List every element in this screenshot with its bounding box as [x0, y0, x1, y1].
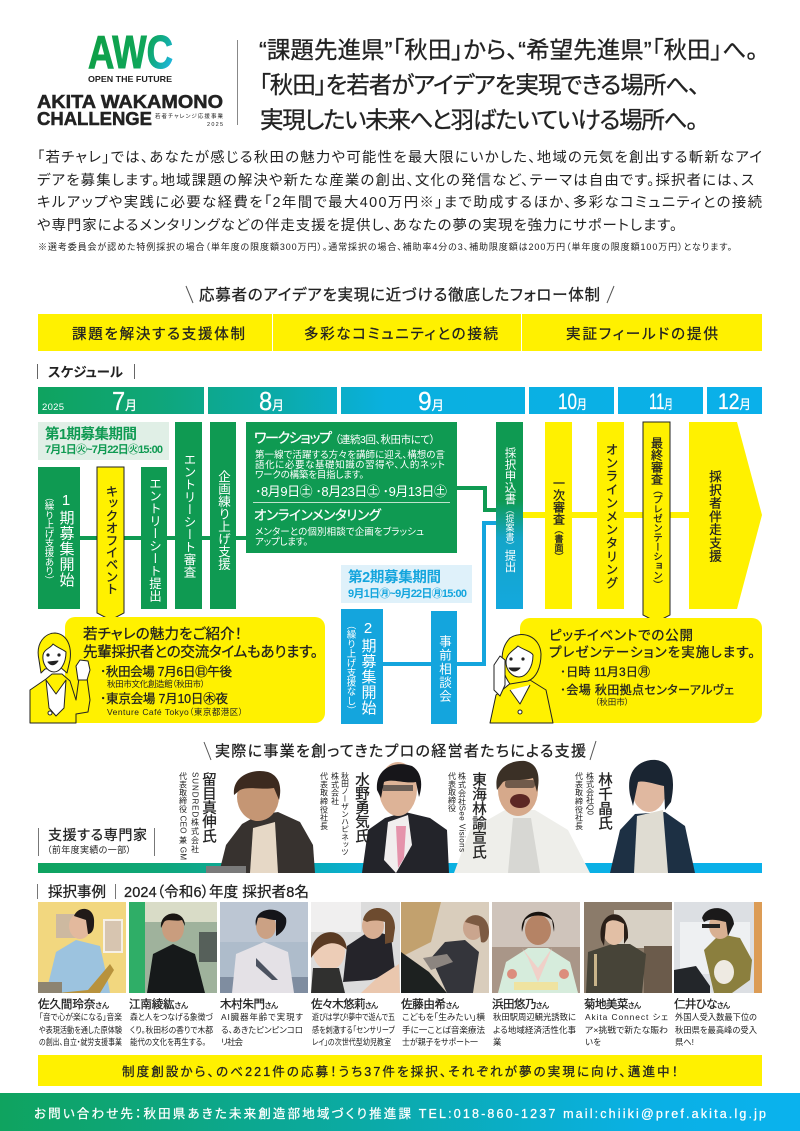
- callout: kickoff event details: Venture Café Tokyo（東京都港区）: [107, 707, 243, 717]
- case 3: Kimura: 木村朱門さん: [220, 997, 279, 1011]
- month bar: 11月: [649, 389, 673, 414]
- expert: Mizuno: 秋田ノーザンハピネッツ: [340, 771, 350, 856]
- label: supporting experts: 支援する専門家: [48, 827, 147, 843]
- case 6: Hamada: [492, 902, 580, 1047]
- headline: [259, 37, 758, 133]
- workshop panel: ･8月9日㊏ ･8月23日㊏ ･9月13日㊏: [255, 484, 447, 499]
- step: entry sheet review: [175, 422, 202, 609]
- step: kickoff event: キックオフイベント: [104, 485, 118, 595]
- expert: Hayashi: 株式会社Q0: [586, 771, 594, 816]
- case 2: Enami: [129, 902, 217, 1047]
- case 2: Enami: 能代の文化を再生する。: [130, 1037, 206, 1047]
- case 4: Sasaki: 感を刺激する「センサリープ: [312, 1025, 396, 1035]
- step: entry sheet submission: [141, 467, 167, 609]
- headline: 「秋田」を若者がアイデアを実現できる場所へ、: [259, 72, 700, 98]
- footnote: ※選考委員会が認めた特例採択の場合（単年度の限度額300万円）。通常採択の場合、補助率4分の3、補助限度額は200万円（単年度の限度額100万円）となります。: [38, 241, 732, 252]
- month bar: 10月: [558, 389, 587, 414]
- section heading: expert support: 実際に事業を創ってきたプロの経営者たちによる支援: [215, 743, 586, 760]
- case 4: Sasaki: 遊びは学び!夢中で遊んで五: [312, 1012, 395, 1022]
- headline: 実現したい未来へと羽ばたいていける場所へ。: [260, 107, 698, 133]
- support band: 多彩なコミュニティとの接続: [304, 325, 498, 343]
- case 4: Sasaki: [311, 902, 400, 1047]
- logo: Akita Wakamono Challenge: 若者チャレンジ応援事業: [155, 112, 223, 120]
- section heading: follow-up system: 応募者のアイデアを実現に近づける徹底したフォロー体制: [199, 285, 600, 304]
- intro text: キルアップや実践に必要な経費を「2年間で最大400万円※」まで助成するほか、多彩なコミュニティとの接続: [37, 193, 762, 211]
- case 5: Sato: 佐藤由希さん: [401, 997, 460, 1011]
- logo: Akita Wakamono Challenge: OPEN THE FUTURE: [88, 74, 172, 84]
- step: application submission: 採択申込書 （提案書） 提出: [504, 447, 516, 572]
- case 1: Sakuma: 「音で心が楽になる」音楽: [39, 1012, 123, 1022]
- expert: Shoji: 代表取締役: [448, 771, 456, 813]
- step: pre-consultation: 事前相談会: [437, 635, 451, 702]
- footer contact: [0, 1093, 800, 1131]
- step: period 1 start: 1期募集開始: [58, 492, 74, 587]
- connector lines: [80, 488, 689, 664]
- step: adopter support arrow: 採択者伴走支援: [707, 470, 721, 562]
- case 1: Sakuma: 佐久間玲奈さん: [38, 997, 110, 1011]
- step: period 1 start: （繰り上げ支援あり）: [42, 492, 54, 585]
- month bar: 7月: [112, 386, 137, 416]
- step: online mentoring: [597, 422, 624, 609]
- case 3: Kimura: AI臓器年齢で実現す: [221, 1012, 303, 1022]
- support band: 実証フィールドの提供: [566, 326, 718, 343]
- case 3: Kimura: [220, 902, 308, 1047]
- period 1 box: 第1期募集期間: [45, 425, 137, 443]
- case 6: Hamada: 秋田駅周辺観光誘致に: [493, 1012, 576, 1022]
- period 2 box: 9月1日㊊~9月22日㊊15:00: [348, 587, 467, 600]
- step: plan refinement: [210, 422, 236, 609]
- case 5: Sato: 手に一ことば音楽療法: [402, 1025, 486, 1035]
- workshop panel: ワークショップ: [254, 430, 332, 446]
- intro text: 「若チャレ」では、あなたが感じる秋田の魅力や可能性を最大限にいかした、地域の元気を創出する斬新なアイ: [37, 149, 762, 166]
- expert: Shoji: [448, 761, 590, 873]
- step: entry sheet review: エントリーシート審査: [182, 453, 196, 578]
- expert: Hayashi: 代表取締役社長: [574, 771, 584, 831]
- gradient strip: [38, 863, 762, 873]
- workshop panel: ワークの構築を目指します。: [255, 469, 364, 481]
- case 4: Sasaki: レイ」の次世代型幼児教室: [312, 1037, 391, 1047]
- step: period 2 start: 2期募集開始: [360, 620, 376, 715]
- step: plan refinement: 企画練り上げ支援: [216, 470, 230, 570]
- expert: Shoji: 東海林諭宣氏: [470, 772, 486, 859]
- expert: Tomeme: [178, 771, 315, 873]
- workshop panel: （連続3回、秋田市にて）: [335, 433, 435, 446]
- cases heading: [37, 884, 309, 901]
- case 7: Kikuchi: [584, 902, 672, 1047]
- step: period 2 start: （繰り上げ支援なし）: [344, 620, 356, 715]
- expert: Tomeme: 留目真伸氏: [200, 772, 216, 843]
- headline: “課題先進県”「秋田」から、“希望先進県”「秋田」へ。: [259, 37, 758, 63]
- workshop panel: オンラインメンタリング: [254, 508, 382, 523]
- case 8: Nii: [674, 902, 762, 1047]
- month bar: [38, 386, 762, 416]
- schedule label: スケジュール: [48, 365, 124, 380]
- callout: kickoff event details: ･秋田会場 7月6日㊐午後: [100, 665, 232, 679]
- period 1 box: 7月1日㊋~7月22日㊋15:00: [45, 443, 163, 456]
- month bar: 8月: [259, 386, 284, 416]
- expert: Tomeme: SUNDRED株式会社: [190, 772, 200, 854]
- case 2: Enami: くり。秋田杉の香りで木都: [130, 1025, 214, 1035]
- case 7: Kikuchi: Akita Connect シェ: [585, 1012, 668, 1022]
- period 2 box: [341, 565, 472, 603]
- label: supporting experts: [38, 827, 155, 856]
- case 3: Kimura: る、あきたピンピンコロ: [221, 1025, 303, 1035]
- callout: pitch event details: ･日時 11月3日㊊: [560, 665, 650, 679]
- case 8: Nii: 外国人受入数最下位の: [675, 1012, 757, 1022]
- month bar: 12月: [718, 389, 751, 414]
- case 7: Kikuchi: いを: [585, 1037, 601, 1047]
- case 4: Sasaki: 佐々木悠莉さん: [311, 997, 379, 1011]
- result band: 制度創設から、のべ221件の応募！うち37件を採択、それぞれが夢の実現に向け、邁進中！: [122, 1064, 678, 1079]
- step: adopter support arrow: [689, 422, 762, 609]
- illustration: woman calling out: [490, 635, 553, 723]
- expert: Hayashi: 林千晶氏: [596, 772, 612, 830]
- case 6: Hamada: 業: [493, 1037, 502, 1047]
- case 1: Sakuma: や表現活動を通した原体験: [39, 1025, 123, 1035]
- step: kickoff event: [97, 467, 124, 620]
- intro text: や専門家によるメンタリングなどの伴走支援を提供し、あなたの夢の実現を強力にサポートします。: [37, 217, 677, 234]
- case 8: Nii: 仁井ひなさん: [674, 997, 731, 1011]
- month bar: 2025: [42, 402, 64, 413]
- callout: kickoff event details: 若チャレの魅力をご紹介！: [83, 626, 242, 643]
- expert: Tomeme: 代表取締役 CEO 兼 GM: [178, 771, 188, 860]
- logo: Akita Wakamono Challenge: 2025: [207, 122, 223, 128]
- step: pre-consultation: [431, 611, 457, 724]
- case 1: Sakuma: [38, 902, 126, 1047]
- expert: Mizuno: 水野勇気氏: [353, 772, 369, 843]
- expert: Hayashi: [574, 760, 695, 873]
- case 6: Hamada: よる地域経済活性化事: [493, 1025, 576, 1035]
- footer contact: お問い合わせ先：秋田県あきた未来創造部地域づくり推進課 TEL:018-860-1237 mail:chiiki@pref.akita.lg.jp: [34, 1106, 766, 1121]
- callout: kickoff event details: ･東京会場 7月10日㊍夜: [100, 692, 228, 706]
- step: entry sheet submission: エントリーシート提出: [147, 477, 161, 602]
- logo: Akita Wakamono Challenge: CHALLENGE: [37, 109, 152, 129]
- period 1 box: [38, 422, 169, 460]
- callout: kickoff event details: 秋田市文化創造館（秋田市）: [107, 679, 205, 689]
- workshop panel: アップします。: [255, 537, 308, 548]
- step: period 2 start: [341, 609, 383, 724]
- case 7: Kikuchi: 菊地美菜さん: [584, 997, 642, 1011]
- logo: Akita Wakamono Challenge: AWC: [88, 26, 173, 78]
- expert: Mizuno: 株式会社: [330, 771, 340, 806]
- workshop panel: [246, 422, 457, 553]
- case 2: Enami: 森と人をつなげる象徴づ: [130, 1012, 213, 1022]
- workshop panel: 第一線で活躍する方々を講師に迎え、構想の言: [255, 449, 445, 461]
- case 3: Kimura: リ社会: [221, 1037, 244, 1047]
- step: period 1 start: [38, 467, 80, 609]
- illustration: woman with raised fist: [30, 633, 90, 723]
- case 6: Hamada: 浜田悠乃さん: [492, 997, 550, 1011]
- logo: Akita Wakamono Challenge: AKITA WAKAMONO: [37, 92, 223, 112]
- callout: pitch event details: プレゼンテーションを実施します。: [549, 645, 755, 660]
- callout: pitch event details: （秋田市）: [595, 697, 629, 707]
- callout: pitch event details: ･会場 秋田拠点センターアルヴェ: [560, 682, 734, 697]
- workshop panel: 語化に必要な基礎知識の習得や、人的ネット: [255, 459, 445, 471]
- period 2 box: 第2期募集期間: [348, 568, 441, 586]
- case 5: Sato: こどもを「生みたい」横: [402, 1012, 486, 1022]
- case 5: Sato: [401, 902, 489, 1047]
- case 1: Sakuma: の創出、自立・就労支援事業: [39, 1037, 123, 1047]
- workshop panel: メンターとの個別相談で企画をブラッシュ: [255, 526, 424, 538]
- expert: Mizuno: [320, 762, 449, 873]
- intro text: デアを募集します。地域課題の解決や新たな産業の創出、文化の発信など、テーマは自由です。採択者には、ス: [37, 171, 754, 189]
- support band: [38, 314, 762, 351]
- logo: Akita Wakamono Challenge: [37, 26, 223, 129]
- callout: kickoff event details: 先輩採択者との交流タイムもあります。: [83, 644, 318, 661]
- support band: 課題を解決する支援体制: [72, 326, 245, 343]
- cases heading: 2024（令和6）年度 採択者8名: [124, 884, 309, 901]
- case 7: Kikuchi: ア×挑戦で新たな賑わ: [585, 1025, 668, 1035]
- intro text: [37, 149, 762, 234]
- callout: kickoff event details: [65, 617, 325, 723]
- case 5: Sato: 士が親子をサポート一: [402, 1037, 479, 1047]
- case 8: Nii: 県へ!: [675, 1037, 694, 1047]
- expert: Shoji: 株式会社See Visions: [458, 771, 466, 852]
- label: supporting experts: （前年度実績の一部）: [47, 844, 131, 855]
- callout: pitch event details: ピッチイベントでの公開: [549, 628, 693, 643]
- expert: Mizuno: 代表取締役社長: [320, 771, 328, 831]
- callout: pitch event details: [520, 618, 762, 723]
- result band: [38, 1055, 762, 1086]
- case 8: Nii: 秋田県を最高峰の受入: [675, 1025, 758, 1035]
- step: first review: [545, 422, 572, 609]
- step: final review: [643, 422, 670, 622]
- case 2: Enami: 江南綾紘さん: [129, 997, 189, 1011]
- cases heading: 採択事例: [48, 884, 106, 901]
- step: first review: 一次審査 （書面）: [552, 477, 566, 561]
- step: final review: 最終審査 （プレゼンテーション）: [650, 437, 664, 590]
- step: application submission: [496, 422, 523, 609]
- month bar: 9月: [418, 386, 444, 416]
- step: online mentoring: オンラインメンタリング: [604, 443, 618, 589]
